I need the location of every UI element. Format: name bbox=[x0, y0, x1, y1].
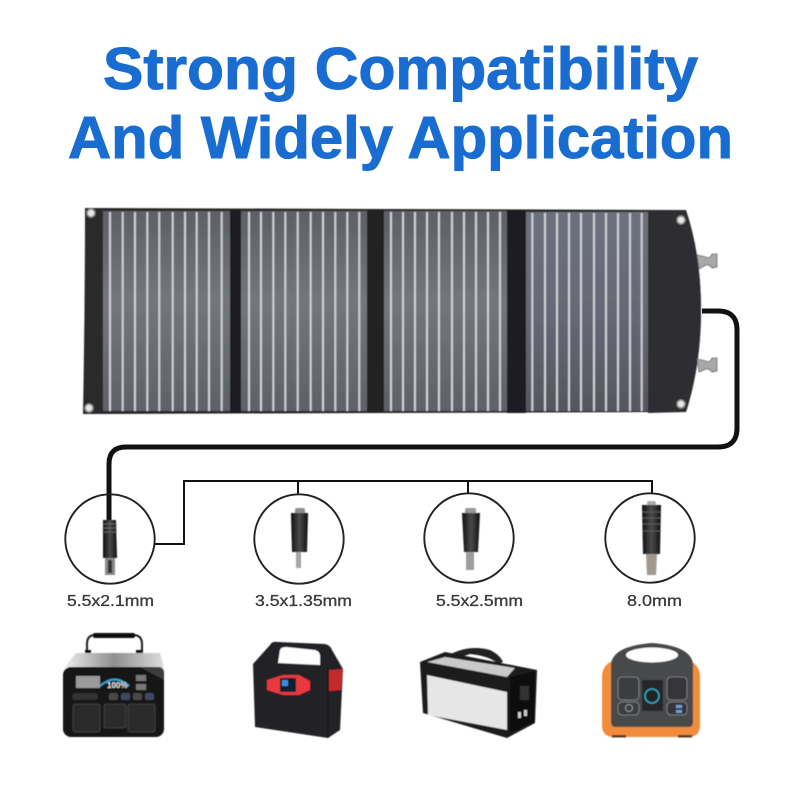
solar cell 1 bbox=[103, 211, 230, 411]
title bbox=[68, 36, 733, 171]
title: Strong Compatibility bbox=[103, 36, 698, 102]
solar cell 4 bbox=[526, 212, 648, 411]
device: black power station with handle: 100% bbox=[107, 681, 127, 690]
solar panel bbox=[83, 208, 717, 414]
adapter wiring bbox=[155, 481, 652, 544]
title: And Widely Application bbox=[68, 105, 733, 171]
eyelets bbox=[85, 209, 685, 412]
device: black and red portable unit bbox=[253, 642, 343, 738]
clips bbox=[697, 254, 717, 372]
device: black power station with handle bbox=[63, 633, 164, 737]
connector 5.5x2.1mm bbox=[65, 494, 155, 584]
size labels bbox=[67, 593, 682, 610]
device: silver power inverter bbox=[420, 648, 537, 738]
solar cell 3 bbox=[384, 211, 507, 411]
main cable bbox=[109, 311, 737, 524]
connector 3.5x1.35mm bbox=[254, 494, 344, 584]
size labels: 3.5x1.35mm bbox=[255, 593, 352, 610]
device: orange power station bbox=[602, 643, 700, 738]
solar cell 2 bbox=[241, 211, 367, 411]
connector 8.0mm bbox=[605, 493, 695, 583]
size labels: 5.5x2.5mm bbox=[436, 593, 523, 610]
size labels: 5.5x2.1mm bbox=[67, 593, 154, 610]
size labels: 8.0mm bbox=[627, 593, 682, 610]
connector 5.5x2.5mm bbox=[424, 493, 514, 583]
